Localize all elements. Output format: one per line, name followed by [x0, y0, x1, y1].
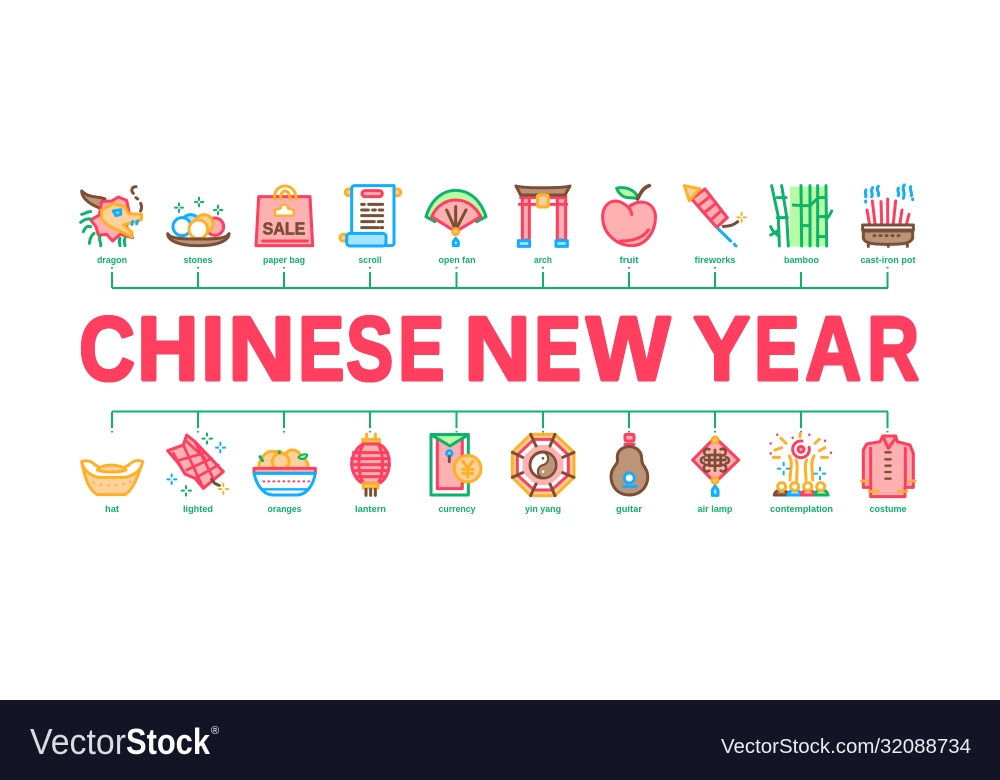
title: E — [754, 298, 800, 400]
labels: top row: bamboo — [784, 255, 820, 265]
icon: paper bag: SALE — [263, 218, 305, 238]
icon: open fan — [426, 190, 486, 246]
labels: top row: fireworks — [694, 255, 736, 265]
icon: costume — [862, 436, 915, 497]
icon: hat — [82, 460, 143, 495]
bottom connector bracket — [112, 412, 888, 432]
labels: bottom row: hat — [105, 504, 119, 514]
footer bar — [0, 700, 1000, 780]
labels: top row: stones — [184, 255, 212, 265]
labels: bottom row: currency — [438, 504, 476, 514]
labels: bottom row: yin yang — [525, 504, 561, 514]
bottom row icons, right half — [512, 433, 915, 497]
labels: bottom row: costume — [870, 504, 906, 514]
title: N — [228, 298, 295, 400]
top row icons, right half — [516, 185, 913, 247]
top row icons, left half — [81, 186, 486, 246]
icon: arch — [516, 186, 570, 246]
icon: currency — [431, 435, 481, 495]
footer logo — [30, 721, 219, 762]
labels: top row: scroll — [358, 255, 382, 265]
title: C — [79, 298, 135, 400]
labels: bottom row: air lamp — [698, 504, 733, 514]
icon: dragon — [81, 187, 142, 246]
footer logo: Stock — [126, 721, 211, 762]
icon: fruit — [603, 186, 655, 246]
labels: bottom row: contemplation — [770, 504, 833, 514]
icon: cast-iron pot — [863, 185, 913, 246]
title: R — [867, 298, 920, 400]
labels: bottom row: lighted — [183, 504, 213, 514]
bottom row icons, left half — [82, 433, 481, 496]
top connector bracket — [112, 267, 888, 288]
labels: top row: fruit — [620, 255, 638, 265]
labels: top row — [97, 255, 916, 265]
icon: lighted — [167, 433, 228, 496]
labels: top row: dragon — [97, 255, 127, 265]
footer image id: VectorStock.com/32088734 — [721, 736, 971, 758]
title: N — [464, 298, 531, 400]
title: E — [298, 298, 344, 400]
title: Y — [693, 298, 750, 400]
footer logo: Vector — [30, 721, 126, 762]
title: W — [586, 298, 670, 400]
labels: bottom row — [105, 504, 906, 514]
labels: top row: cast-iron pot — [860, 255, 916, 265]
labels: bottom row: guitar — [616, 504, 643, 514]
title: E — [534, 298, 581, 400]
labels: top row: arch — [534, 255, 552, 265]
icon: guitar — [611, 434, 648, 495]
icon: fireworks — [684, 186, 746, 246]
footer logo: ® — [211, 725, 219, 737]
title: S — [346, 298, 394, 400]
icon: contemplation — [771, 433, 831, 495]
icon: paper bag — [256, 186, 313, 246]
labels: top row: paper bag — [263, 255, 305, 265]
labels: bottom row: lantern — [355, 504, 386, 514]
icon: air lamp — [693, 437, 739, 495]
icon: bamboo — [771, 186, 832, 247]
icon: oranges — [254, 450, 315, 495]
icon: yin yang — [512, 434, 574, 496]
title: A — [805, 298, 861, 400]
labels: top row: open fan — [438, 255, 476, 265]
title: E — [398, 298, 444, 400]
icon: stones — [168, 198, 229, 246]
title: H — [137, 298, 199, 400]
labels: bottom row: oranges — [268, 504, 302, 514]
title: I — [201, 298, 225, 400]
icon: lantern — [352, 434, 389, 495]
icon: scroll — [340, 186, 401, 246]
